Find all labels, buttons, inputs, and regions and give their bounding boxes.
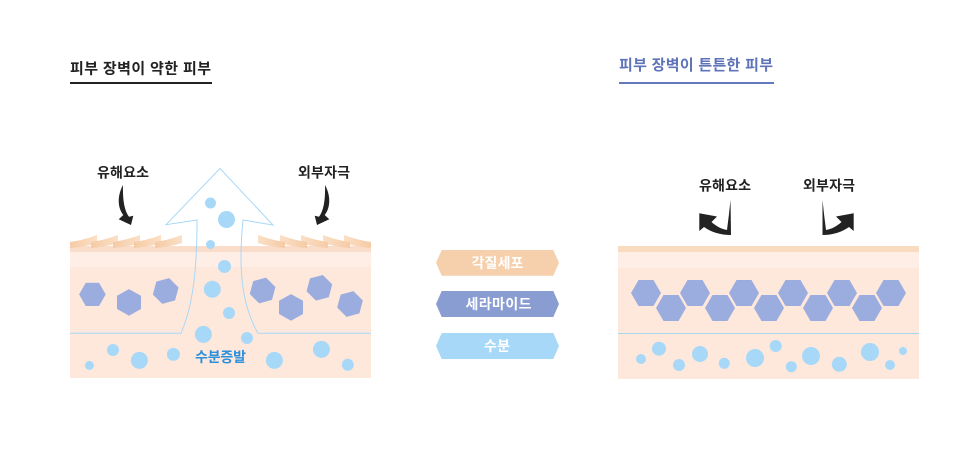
arrow: harmful factors entering (119, 185, 133, 225)
damaged corneocyte scales right (258, 235, 371, 248)
panel: weak skin barrier (70, 60, 371, 378)
label: harmful factors: 유해요소 (97, 164, 149, 180)
ceramide hexagon wall (631, 280, 906, 321)
damaged corneocyte scales left (70, 235, 182, 248)
scattered ceramide hexagons (79, 275, 363, 321)
arrow: harmful factors deflected (699, 200, 731, 235)
skin layers (618, 246, 919, 379)
label: external irritation: 외부자극 (803, 178, 855, 194)
panel: strong skin barrier (618, 57, 919, 379)
legend: ceramide: 세라마이드 (466, 296, 532, 312)
arrow: external irritation deflected (822, 200, 854, 235)
arrow: water evaporation outline (70, 168, 371, 333)
legend: water: 수분 (484, 338, 510, 354)
skin layers (70, 246, 371, 378)
label: harmful factors: 유해요소 (699, 178, 751, 194)
heading: strong skin barrier: 피부 장벽이 튼튼한 피부 (619, 57, 773, 74)
water particles rising in arrow (195, 198, 253, 344)
water particles in lower layer (85, 341, 354, 371)
legend (436, 250, 559, 359)
heading: weak skin barrier: 피부 장벽이 약한 피부 (70, 60, 211, 78)
water particles retained (636, 340, 907, 372)
label: external irritation: 외부자극 (298, 164, 350, 180)
label: water evaporation: 수분증발 (195, 349, 246, 365)
arrow: external irritation entering (315, 185, 329, 225)
legend: corneocyte: 각질세포 (472, 255, 524, 271)
